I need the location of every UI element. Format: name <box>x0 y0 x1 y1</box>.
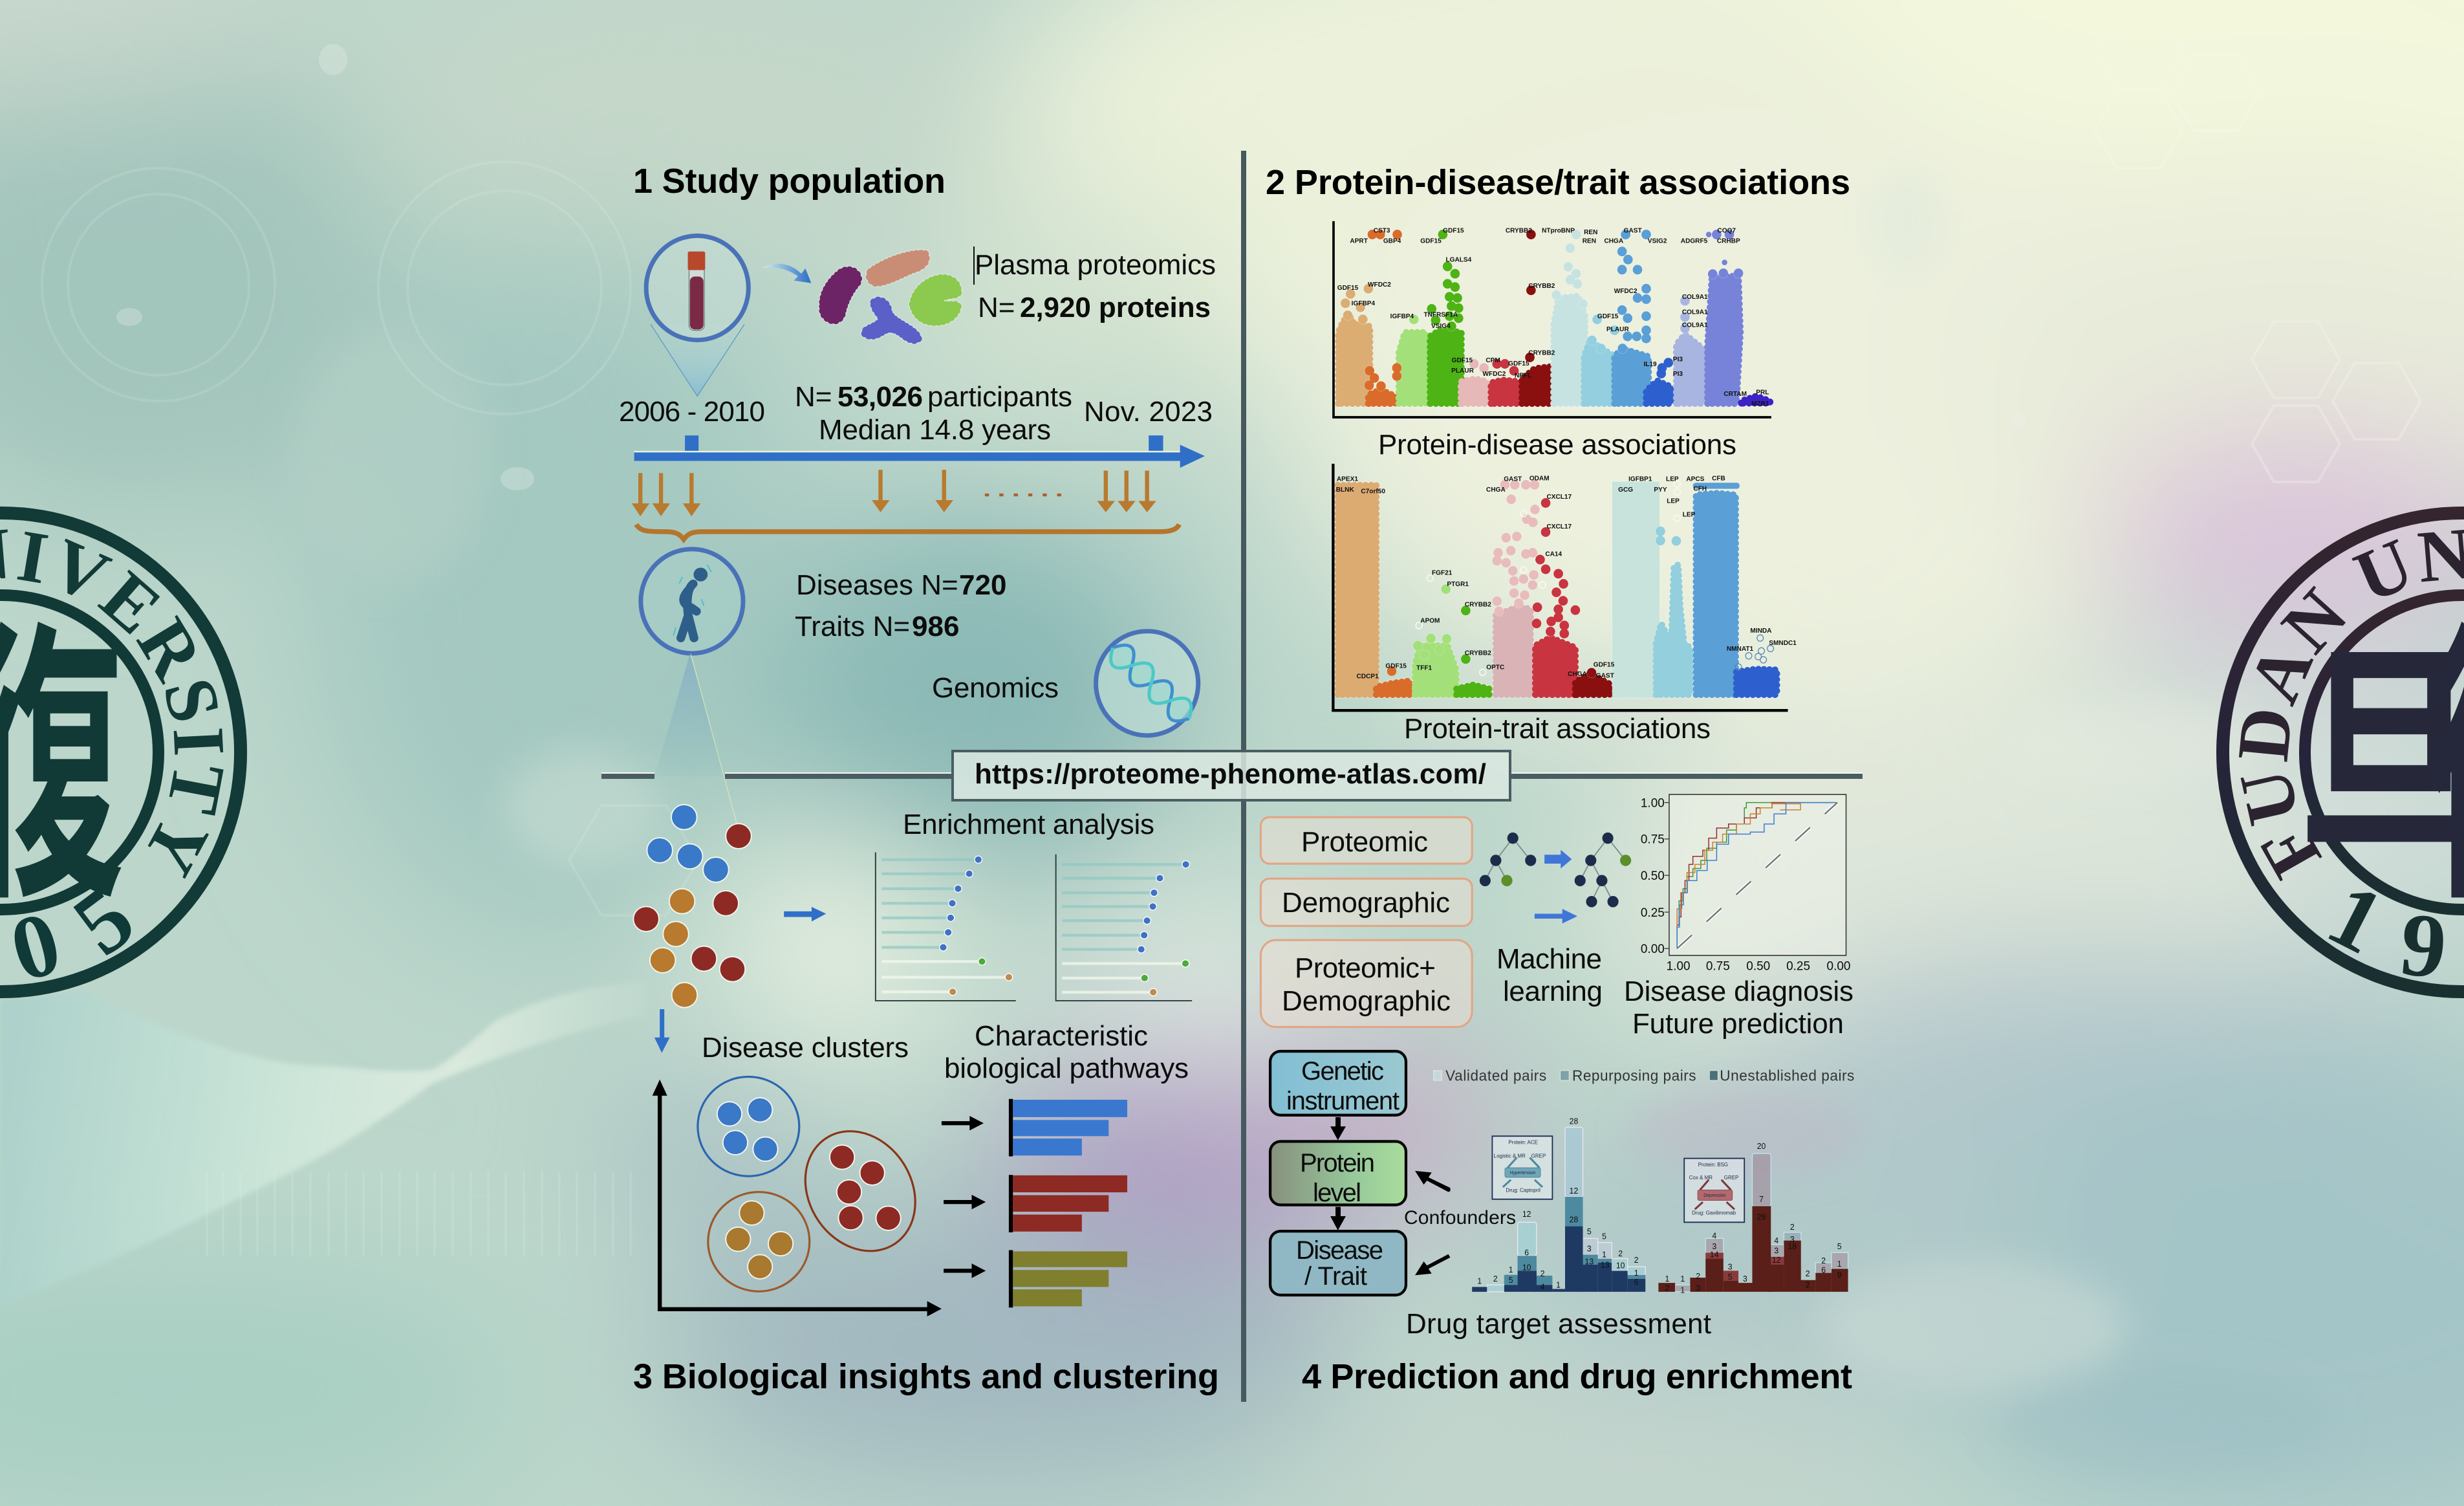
chart: protein-disease manhattan plot: IGFBP4 <box>1390 313 1414 320</box>
drug enrichment bar chart: red: 4 <box>1712 1231 1716 1240</box>
panel: 2 protein-disease/trait associations <box>1266 163 1850 745</box>
drug enrichment bar chart: blue: 13 <box>1601 1260 1610 1269</box>
chart: protein-trait manhattan plot: APOM <box>1420 617 1440 625</box>
chart: protein-trait manhattan plot: LEP <box>1666 476 1679 483</box>
legend: Validated pairs <box>1445 1067 1546 1084</box>
drug enrichment bar chart: blue: 28 <box>1570 1117 1578 1126</box>
barcode texture <box>207 1172 631 1256</box>
chart: protein-trait manhattan plot: FGF21 <box>1432 570 1453 577</box>
chart: protein-trait manhattan plot: CXCL17 <box>1546 523 1572 530</box>
chart: protein-trait manhattan plot: GAST <box>1504 476 1522 483</box>
chart: protein-trait manhattan plot: CDCP1 <box>1357 673 1379 681</box>
chart: protein-disease manhattan plot: PLAUR <box>1606 326 1629 333</box>
drug enrichment bar chart: red: 1 <box>1680 1274 1685 1283</box>
scattered disease dots <box>633 805 751 1008</box>
label: characteristic pathways: Characteristic <box>975 1020 1148 1052</box>
drug enrichment bar chart: red: 2 <box>1790 1223 1795 1232</box>
drug enrichment bar chart: blue: 5 <box>1587 1227 1592 1236</box>
chart: protein-disease manhattan plot: COL9A1 <box>1682 294 1708 301</box>
drug enrichment bar chart: red: 5 <box>1728 1272 1733 1282</box>
pathway bars: blue <box>1009 1099 1127 1157</box>
chart: protein-disease manhattan plot: REN <box>1584 229 1597 236</box>
ROC chart: 1.00 <box>1667 959 1691 973</box>
drug enrichment bar chart: red: 2 <box>1665 1284 1669 1293</box>
arrow down to clusters <box>654 1009 669 1053</box>
arrow to enrichment <box>784 907 826 921</box>
chart: protein-trait manhattan plot: GDF15 <box>1594 662 1615 669</box>
drug enrichment bar chart: red: 1 <box>1665 1274 1669 1283</box>
drug enrichment bar chart: blue: 2 <box>1540 1269 1545 1278</box>
chart: protein-disease manhattan plot: PI3 <box>1673 371 1683 378</box>
drug enrichment bar chart: red: 2 <box>1806 1269 1810 1278</box>
chart: protein-disease manhattan plot: CRTAM <box>1724 391 1747 398</box>
label: machine learning: Machine <box>1497 943 1602 975</box>
drug enrichment bar chart: blue: 3 <box>1587 1244 1592 1253</box>
chart: protein-disease manhattan plot: GDF15 <box>1452 357 1473 364</box>
chart: protein-disease manhattan plot: GBP4 <box>1383 238 1401 245</box>
chart: protein-trait manhattan plot: GCG <box>1618 486 1633 494</box>
chart: protein-disease manhattan plot: PLAUR <box>1451 367 1474 375</box>
label: disease diagnosis and prediction <box>1624 976 1853 1040</box>
decision trees <box>1480 833 1631 907</box>
ROC chart: 0.50 <box>1746 959 1770 973</box>
heading: protein associations: 2 Protein-disease/trait associations <box>1266 163 1850 202</box>
drug enrichment bar chart: blue: 6 <box>1524 1249 1529 1258</box>
flow labels: / Trait <box>1304 1262 1367 1291</box>
chart: protein-trait manhattan plot: CFH <box>1693 486 1707 493</box>
drug enrichment bar chart: red: 5 <box>1837 1242 1842 1251</box>
drug enrichment bar chart: red: 3 <box>1712 1242 1716 1251</box>
panel: 3 biological insights and clustering <box>633 805 1219 1396</box>
inset: hypertension target <box>1492 1136 1552 1199</box>
chart: protein-trait manhattan plot: CA14 <box>1545 551 1562 558</box>
chart: protein-trait manhattan plot: OPTC <box>1486 664 1505 671</box>
label: diseases and traits counts: 986 <box>912 611 959 642</box>
label: protein-trait associations: Protein-trait associations <box>1404 713 1711 745</box>
inset: depression target: Depression <box>1703 1194 1726 1198</box>
ROC chart: 0.50 <box>1641 869 1665 883</box>
wave ribbon <box>0 981 647 1305</box>
drug enrichment bar chart: blue: 10 <box>1616 1261 1625 1271</box>
chart: protein-disease manhattan plot: WFDC2 <box>1614 288 1637 295</box>
inset: hypertension target: GREP <box>1531 1153 1546 1159</box>
chart: protein-disease manhattan plot: IL19 <box>1643 361 1657 368</box>
drug enrichment bar chart: red: 7 <box>1759 1195 1764 1204</box>
flow labels: Genetic <box>1301 1057 1384 1086</box>
chart: protein-disease manhattan plot: GDF15 <box>1597 313 1619 320</box>
drug enrichment bar chart: red: 3 <box>1774 1246 1778 1256</box>
chart: protein-disease manhattan plot: GAST <box>1624 227 1642 234</box>
chart: protein-disease manhattan plot: GDF15 <box>1337 285 1359 292</box>
chart: protein-disease manhattan plot: COL9A1 <box>1682 322 1708 329</box>
chart: protein-trait manhattan plot: CRYBB2 <box>1465 649 1491 657</box>
chart: protein-disease manhattan plot: GDF15 <box>1443 227 1464 234</box>
ROC chart: 0.75 <box>1706 959 1730 973</box>
drug enrichment bar chart: red: 1 <box>1837 1260 1842 1269</box>
drug enrichment bar chart: red: 3 <box>1696 1284 1700 1293</box>
drug enrichment bar chart: red: 2 <box>1806 1281 1810 1290</box>
feature labels: Proteomic+ <box>1295 952 1436 984</box>
drug enrichment bar chart: blue: 1 <box>1477 1276 1482 1285</box>
chart: protein-disease manhattan plot: PI3 <box>1673 356 1683 364</box>
icon: proteins <box>823 254 958 340</box>
chart: protein-trait manhattan plot: CXCL17 <box>1546 494 1572 501</box>
label: disease diagnosis and prediction: Future prediction <box>1632 1008 1844 1040</box>
drug enrichment bar chart: red: 14 <box>1710 1250 1719 1260</box>
panel: 1 study population <box>619 162 1216 825</box>
pathway bars: red <box>1009 1175 1127 1232</box>
chart: protein-disease manhattan plot: CPM <box>1486 357 1500 364</box>
timeline arrow <box>634 435 1205 468</box>
chart: protein-trait manhattan plot: CHGA <box>1568 671 1587 678</box>
label: participants: N= <box>795 381 832 413</box>
chart: protein-disease manhattan plot: GDF15 <box>1420 238 1442 245</box>
label: confounders: Confounders <box>1404 1207 1516 1228</box>
icon: person circle <box>641 549 743 653</box>
arrows to pathway bars <box>942 1116 986 1278</box>
label: characteristic pathways <box>944 1020 1189 1084</box>
chart: protein-trait manhattan plot: SMNDC1 <box>1769 640 1797 647</box>
drug enrichment bar chart: blue: 1 <box>1602 1250 1606 1260</box>
drug enrichment bar chart: blue: 12 <box>1570 1186 1578 1195</box>
drug enrichment bar chart: red: 2 <box>1696 1272 1700 1281</box>
label: plasma proteomics: N= <box>978 292 1015 323</box>
chart: protein-disease manhattan plot: APRT <box>1350 238 1368 245</box>
drug enrichment bar chart: red: 18 <box>1788 1242 1797 1251</box>
brace <box>636 525 1179 540</box>
label: diseases and traits counts: Traits N= <box>795 611 910 642</box>
chart: protein-disease manhattan plot: CHGA <box>1604 238 1624 245</box>
drug enrichment bar chart: red: 12 <box>1772 1256 1781 1265</box>
feature labels: Proteomic <box>1301 826 1428 858</box>
ROC chart: 1.00 <box>1641 796 1665 811</box>
icon: blood tube circle <box>646 235 748 340</box>
drug enrichment bar chart: red <box>1658 1142 1848 1295</box>
clusters <box>698 1076 937 1291</box>
chart: protein-disease manhattan plot: VSIG4 <box>1431 323 1451 330</box>
chart: protein-trait manhattan plot: PYY <box>1654 486 1667 494</box>
label: end date: Nov. 2023 <box>1084 396 1213 428</box>
ROC chart <box>1641 794 1850 973</box>
chart: protein-disease manhattan plot: WFDC2 <box>1483 371 1506 378</box>
label: machine learning: learning <box>1503 976 1603 1007</box>
drug enrichment bar chart: blue: 13 <box>1585 1257 1594 1266</box>
label: participants <box>795 381 1072 446</box>
chart: protein-disease manhattan plot: PRL <box>1756 389 1769 396</box>
lollipop chart 1 <box>876 853 1016 1001</box>
heading: biological insights: 3 Biological insights and clustering <box>633 1357 1219 1396</box>
arrow: curved blue <box>762 264 811 283</box>
label: participants: participants <box>927 381 1072 413</box>
feature boxes <box>1260 817 1472 1027</box>
flow boxes <box>1270 1051 1406 1295</box>
chart: protein-trait manhattan plot: GDF15 <box>1385 662 1407 670</box>
drug enrichment bar chart: red: 1 <box>1680 1286 1685 1295</box>
chart: protein-disease manhattan plot: LGALS4 <box>1445 256 1472 263</box>
chart: protein-disease manhattan plot: CRYBB2 <box>1528 350 1555 357</box>
flow labels: Disease <box>1296 1236 1383 1265</box>
ROC chart: 0.00 <box>1827 959 1850 973</box>
drug enrichment bar chart: blue: 10 <box>1522 1263 1531 1272</box>
drug enrichment bar chart: red: 6 <box>1821 1265 1826 1275</box>
label: machine learning <box>1497 943 1603 1007</box>
inset: depression target: GREP <box>1724 1175 1738 1181</box>
label: plasma proteomics: 2,920 proteins <box>1020 292 1211 323</box>
chart: protein-trait manhattan plot: APCS <box>1686 476 1705 483</box>
follow-up arrows <box>632 470 1156 516</box>
label: plasma proteomics: Plasma proteomics <box>975 249 1216 281</box>
icon group: illustrations in panel 1 <box>632 235 1205 825</box>
inset: depression target: Cox & MR <box>1689 1175 1713 1181</box>
label: participants: Median 14.8 years <box>819 414 1051 446</box>
chart: protein-trait manhattan plot: CRYBB2 <box>1465 601 1491 609</box>
url box: https://proteome-phenome-atlas.com/ <box>975 758 1486 790</box>
chart: protein-trait manhattan plot: ODAM <box>1529 475 1550 483</box>
drug enrichment bar chart: blue: 1 <box>1509 1265 1513 1274</box>
drug enrichment bar chart: red: 20 <box>1757 1142 1766 1151</box>
chart: protein-trait manhattan plot: TFF1 <box>1416 665 1432 672</box>
drug enrichment bar chart: blue: 5 <box>1509 1276 1513 1285</box>
inset: hypertension target: Logistic & MR <box>1494 1153 1526 1159</box>
heading: study population: 1 Study population <box>633 162 946 201</box>
label: disease diagnosis and prediction: Disease diagnosis <box>1624 976 1853 1007</box>
chart: protein-trait manhattan plot: BLNK <box>1336 486 1354 494</box>
chart: protein-trait manhattan plot: LEP <box>1683 512 1696 519</box>
heading: prediction: 4 Prediction and drug enrichment <box>1302 1357 1852 1396</box>
pointer cone under person <box>655 654 737 825</box>
legend: Unestablished pairs <box>1720 1067 1854 1084</box>
chart: protein-disease manhattan plot: MZB1 <box>1751 400 1769 408</box>
legend <box>1434 1067 1854 1084</box>
lollipop chart 2 <box>1056 855 1192 1001</box>
inset: depression target: Drug: Gavilimomab <box>1692 1210 1736 1216</box>
flow arrows <box>1330 1117 1451 1275</box>
chart: protein-trait manhattan plot: LEP <box>1667 497 1680 505</box>
drug enrichment bar chart: red: 3 <box>1790 1235 1795 1244</box>
chart: protein-trait manhattan plot: PTGR1 <box>1447 581 1469 588</box>
chart: protein-disease manhattan plot: CRYBB2 <box>1506 227 1532 234</box>
inset: hypertension target: Hypertension <box>1510 1171 1536 1175</box>
drug enrichment bar chart: red: 9 <box>1837 1271 1842 1280</box>
chart: protein-trait manhattan plot: MINDA <box>1750 628 1772 635</box>
illustrations of panel 4 <box>1260 794 1854 1295</box>
flow labels: instrument <box>1286 1087 1400 1115</box>
chart: protein-trait manhattan plot: CHGA <box>1486 486 1506 494</box>
label: characteristic pathways: biological pathways <box>944 1053 1189 1084</box>
chart: protein-disease manhattan plot: IGFBP4 <box>1352 300 1375 307</box>
feature labels: Demographic <box>1282 985 1451 1017</box>
cluster scatter axes <box>653 1080 942 1316</box>
ROC chart: 0.25 <box>1641 906 1665 920</box>
drug enrichment bar chart: red: 3 <box>1743 1274 1747 1283</box>
chart: protein-disease manhattan plot: GDF15 <box>1508 360 1529 367</box>
chart: protein-disease manhattan plot <box>1334 221 1771 417</box>
chart: protein-disease manhattan plot: CRYBB2 <box>1528 283 1555 290</box>
drug enrichment bar chart: blue: 2 <box>1634 1256 1639 1265</box>
dividers <box>601 151 1863 1402</box>
ROC chart: 0.25 <box>1786 959 1810 973</box>
label: protein-disease associations: Protein-disease associations <box>1378 429 1736 461</box>
chart: protein-disease manhattan plot: COQ7 <box>1717 227 1736 234</box>
drug enrichment bar chart: blue: 2 <box>1493 1274 1498 1283</box>
label: enrichment analysis: Enrichment analysis <box>903 809 1154 840</box>
chart: protein-trait manhattan plot: GAST <box>1596 672 1615 680</box>
feature labels <box>1282 826 1451 1017</box>
illustrations of panel 3 <box>633 805 1192 1316</box>
flow labels: level <box>1313 1179 1361 1207</box>
drug enrichment bar chart: blue: 28 <box>1570 1215 1578 1224</box>
chart: protein-disease manhattan plot: WFDC2 <box>1368 281 1391 289</box>
panel: 4 prediction and drug enrichment <box>1260 794 1854 1396</box>
inset: depression target <box>1684 1159 1744 1222</box>
label: diseases and traits counts: Diseases N= <box>796 569 958 601</box>
label: genomics: Genomics <box>932 672 1059 704</box>
inset: hypertension target: Drug: Captopril <box>1506 1187 1540 1194</box>
chart: protein-trait manhattan plot: IGFBP1 <box>1628 476 1652 483</box>
url box <box>953 751 1510 800</box>
label: plasma proteomics <box>974 246 1216 323</box>
chart: protein-trait manhattan plot: C7orf50 <box>1361 488 1385 496</box>
pointer cone under blood tube <box>651 324 744 396</box>
label: drug target assessment: Drug target assessment <box>1406 1308 1711 1340</box>
inset: depression target: Protein: BSG <box>1698 1162 1728 1168</box>
label: disease clusters: Disease clusters <box>702 1032 909 1064</box>
feature labels: Demographic <box>1282 887 1450 919</box>
flow labels <box>1286 1057 1400 1291</box>
chart: protein-trait manhattan plot: NMNAT1 <box>1727 646 1753 653</box>
pathway bars: olive <box>1009 1250 1127 1307</box>
drug enrichment bar chart: blue: 6 <box>1634 1278 1639 1287</box>
chart: protein-trait manhattan plot: CFB <box>1712 475 1725 483</box>
drug enrichment bar chart: red: 2 <box>1821 1256 1826 1265</box>
drug enrichment bar chart: red: 4 <box>1774 1236 1778 1245</box>
chart: protein-trait manhattan plot <box>1333 464 1797 710</box>
chart: protein-disease manhattan plot: CRHBP <box>1717 238 1740 245</box>
arrows to ROC <box>1535 850 1577 924</box>
drug enrichment bar chart: red: 29 <box>1757 1213 1766 1222</box>
drug enrichment bar chart: red: 3 <box>1728 1262 1733 1272</box>
drug enrichment bar chart: blue: 1 <box>1556 1281 1561 1290</box>
legend: Repurposing pairs <box>1572 1067 1696 1084</box>
chart: protein-disease manhattan plot: NEFL <box>1515 373 1531 380</box>
label: diseases and traits counts: 720 <box>959 569 1006 601</box>
drug enrichment bar chart: blue: 2 <box>1618 1249 1623 1258</box>
drug enrichment bar chart: blue: 5 <box>1602 1232 1606 1241</box>
label: participants: 53,026 <box>838 381 923 413</box>
chart: protein-disease manhattan plot: NTproBNP <box>1542 227 1575 234</box>
ROC chart: 0.00 <box>1641 943 1665 956</box>
drug enrichment bar chart: blue: 12 <box>1522 1210 1531 1219</box>
label: enrollment years: 2006 - 2010 <box>619 396 765 428</box>
drug enrichment bar chart: blue <box>1472 1117 1645 1292</box>
label: diseases and traits counts <box>795 569 1006 642</box>
chart: protein-disease manhattan plot: VSIG2 <box>1648 238 1667 245</box>
drug enrichment bar chart: blue: 1 <box>1634 1269 1639 1278</box>
chart: protein-trait manhattan plot: APEX1 <box>1337 476 1358 483</box>
chart: protein-disease manhattan plot: CST3 <box>1374 227 1390 234</box>
inset: hypertension target: Protein: ACE <box>1508 1140 1539 1146</box>
chart: protein-disease manhattan plot: TNFRSF1A <box>1424 311 1458 318</box>
chart: protein-disease manhattan plot: COL9A1 <box>1682 309 1708 316</box>
chart: protein-disease manhattan plot: ADGRF5 <box>1681 238 1708 245</box>
flow labels: Protein <box>1300 1149 1375 1177</box>
icon: DNA circle <box>1096 631 1198 736</box>
drug enrichment bar chart: blue: 4 <box>1540 1283 1545 1292</box>
ROC chart: 0.75 <box>1641 833 1665 847</box>
chart: protein-disease manhattan plot: REN <box>1583 238 1596 245</box>
